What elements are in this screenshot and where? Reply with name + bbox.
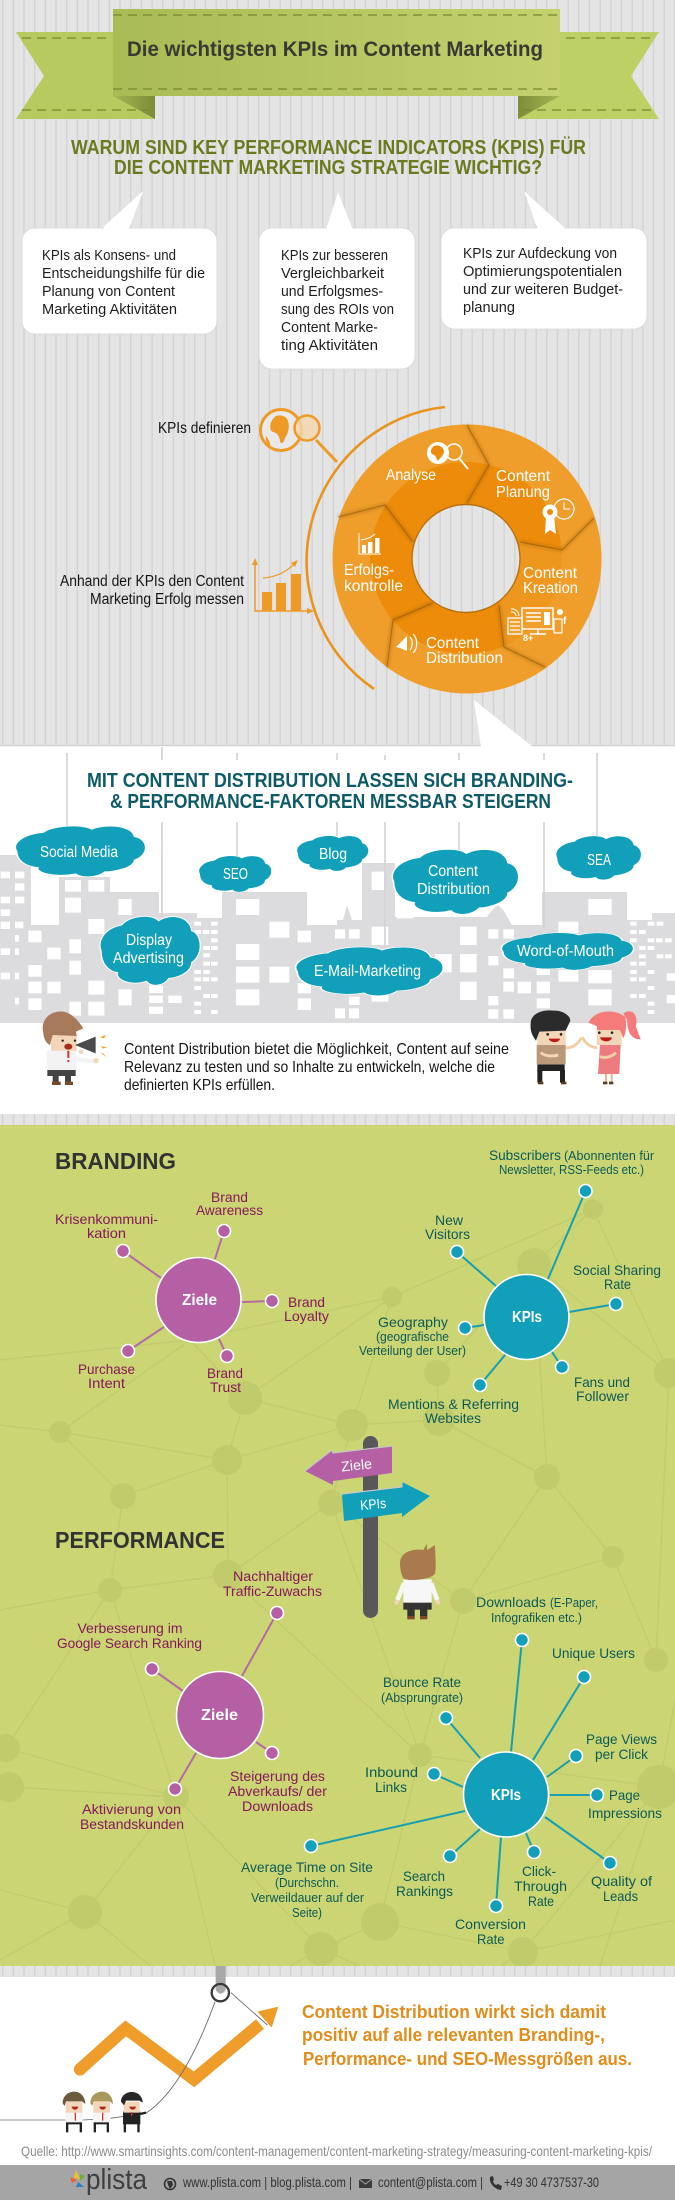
speech bubble 2: sung des ROIs von <box>281 301 394 318</box>
label: Click-Through Rate: Rate <box>528 1893 554 1909</box>
performance KPI diagram <box>241 1594 662 1947</box>
icon: small chart <box>359 533 381 554</box>
label: Inbound Links: Links <box>375 1779 407 1795</box>
label: Page Impressions <box>588 1787 662 1821</box>
label: Quality of Leads <box>591 1873 652 1904</box>
cloud: SEA <box>556 836 641 880</box>
label: Page Impressions: Page <box>609 1787 640 1803</box>
segment label: Content Distribution: Distribution <box>426 650 503 667</box>
label: Anhand der KPIs: Anhand der KPIs den Content <box>60 573 245 590</box>
label: Social Sharing Rate <box>573 1262 661 1292</box>
growth arrow <box>74 2007 278 2079</box>
heading: BRANDING: BRANDING <box>55 1148 176 1174</box>
label: KPIs definieren: KPIs definieren <box>158 420 251 437</box>
label: Mentions and Referring Websites: Websites <box>425 1410 481 1426</box>
label: Verbesserung im Google Search Ranking <box>57 1620 202 1651</box>
panel: green KPI network section <box>0 1125 675 1967</box>
label: Brand Awareness: Awareness <box>196 1202 263 1218</box>
man two <box>90 2092 113 2132</box>
speech bubble 3: und zur weiteren Budget- <box>463 281 623 298</box>
footer email: content@plista.com | <box>378 2174 483 2190</box>
segment label: Content Planung: Content <box>496 468 551 485</box>
speech bubble 2 <box>259 192 415 369</box>
label: Subscribers: Newsletter, RSS-Feeds etc.) <box>499 1163 644 1177</box>
speech bubble 3: KPIs zur Aufdeckung von <box>463 245 617 262</box>
cloud: E-Mail-Marketing <box>295 947 443 996</box>
heading: why KPIs matter <box>71 136 586 179</box>
paragraph: content distribution: Content Distribution bietet die Möglichkeit, Content auf seine <box>124 1041 509 1058</box>
plista logo: plista <box>86 2164 148 2196</box>
label: Page Views per Click: per Click <box>595 1746 649 1762</box>
arrow: KPIs <box>342 1482 430 1521</box>
speech bubble 2: ting Aktivitäten <box>281 337 378 354</box>
section bottom edge line <box>0 745 675 746</box>
label: Mentions and Referring Websites <box>388 1396 519 1426</box>
speech bubble 1: Marketing Aktivitäten <box>42 301 177 318</box>
label: Quality of Leads: Quality of <box>591 1873 652 1889</box>
label: Geography: (geografische <box>376 1330 449 1344</box>
label: Click-Through Rate: Through <box>514 1878 567 1894</box>
icon: megaphone <box>396 634 417 653</box>
label: Brand Loyalty: Brand <box>288 1294 325 1310</box>
background: striped grey header section <box>0 0 675 746</box>
label: Downloads: (E-Paper, <box>550 1596 598 1610</box>
label: Aktivierung von Bestandskunden: Bestandskunden <box>80 1816 184 1832</box>
cloud: Display Advertising: Advertising <box>113 950 184 967</box>
label: Brand Trust: Brand <box>207 1365 243 1381</box>
segment label: Erfolgskontrolle: Erfolgs- <box>344 562 394 579</box>
cloud: Display Advertising: Display <box>126 932 172 949</box>
heading: PERFORMANCE: PERFORMANCE <box>55 1527 225 1553</box>
icon: devices and social: f <box>563 616 567 627</box>
icon: globe <box>164 2178 176 2190</box>
title ribbon <box>16 9 659 119</box>
icon: phone <box>490 2176 502 2190</box>
label: Downloads <box>476 1594 598 1625</box>
label: Page Views per Click: Page Views <box>586 1731 657 1747</box>
branding KPI diagram: KPIs <box>512 1309 542 1326</box>
segment label: Content Distribution: Content <box>426 635 480 652</box>
characters: high-five couple <box>531 1010 641 1084</box>
tick strip above green section <box>0 1114 675 1125</box>
branding goals diagram: Ziele <box>182 1292 217 1309</box>
label: Purchase Intent: Purchase <box>78 1361 135 1377</box>
label: Anhand der KPIs: Marketing Erfolg messen <box>90 591 244 608</box>
city skyline <box>0 855 675 1023</box>
speech pointer from distribution segment <box>474 700 533 747</box>
cloud: SEA: SEA <box>587 852 612 869</box>
man one <box>63 2092 85 2132</box>
label: Subscribers <box>489 1147 654 1177</box>
label: Krisenkommunikation: Krisenkommuni- <box>55 1211 158 1227</box>
cloud: SEO: SEO <box>223 866 248 883</box>
speech bubble 2: KPIs zur besseren <box>281 247 388 264</box>
performance KPI diagram: KPIs <box>491 1787 521 1804</box>
speech bubble 1: KPIs als Konsens- und <box>42 247 176 264</box>
heading: why KPIs matter: DIE CONTENT MARKETING STRATEGIE WICHTIG? <box>114 157 542 179</box>
label: Bounce Rate <box>381 1674 463 1705</box>
segment label: Content Kreation: Content <box>523 565 578 582</box>
heading: content distribution <box>87 770 573 813</box>
label: Conversion Rate: Conversion <box>455 1916 526 1932</box>
speech bubble 1: Entscheidungshilfe für die <box>42 265 205 282</box>
label: Quality of Leads: Leads <box>603 1888 638 1904</box>
cloud: SEO <box>199 856 272 892</box>
arrow: KPIs: KPIs <box>359 1495 387 1513</box>
label: Social Sharing Rate: Social Sharing <box>573 1262 661 1278</box>
label: Nachhaltiger Traffic-Zuwachs <box>223 1568 322 1599</box>
cloud: Content Distribution: Distribution <box>417 881 490 898</box>
icon: envelope <box>359 2179 372 2188</box>
label: Purchase Intent <box>78 1361 135 1391</box>
label: Inbound Links: Inbound <box>365 1764 418 1780</box>
label: Brand Awareness <box>196 1189 263 1218</box>
segment label: Erfolgskontrolle <box>344 562 403 595</box>
label: Average Time on Site: Average Time on Site <box>241 1859 373 1875</box>
label: Average Time on Site: Seite) <box>292 1906 322 1920</box>
label: Nachhaltiger Traffic-Zuwachs: Traffic-Zuwachs <box>223 1583 322 1599</box>
cloud: Word-of-Mouth: Word-of-Mouth <box>517 943 614 960</box>
label: Anhand der KPIs <box>60 573 245 608</box>
icon: devices and social <box>508 608 567 643</box>
cloud: Display Advertising <box>100 916 200 985</box>
label: Fans und Follower: Follower <box>576 1388 629 1404</box>
cloud: Social Media <box>15 826 146 877</box>
heading: why KPIs matter: WARUM SIND KEY PERFORMANCE INDICATORS (KPIS) FÜR <box>71 136 586 159</box>
content marketing cycle donut <box>332 424 610 694</box>
label: Verbesserung im Google Search Ranking: Google Search Ranking <box>57 1635 202 1651</box>
icon: clock and rosette <box>542 499 574 534</box>
closing statement: Performance- und SEO-Messgrößen aus. <box>303 2048 632 2069</box>
label: Nachhaltiger Traffic-Zuwachs: Nachhaltiger <box>233 1568 313 1584</box>
arrow: Ziele <box>305 1446 392 1485</box>
speech bubble 1: Planung von Content <box>42 283 176 300</box>
label: Conversion Rate <box>455 1916 526 1947</box>
speech bubble 3: planung <box>463 299 515 316</box>
label: Unique Users: Unique Users <box>552 1645 635 1661</box>
label: Brand Awareness: Brand <box>211 1189 248 1205</box>
label: Fans und Follower: Fans und <box>574 1374 630 1390</box>
orange arc around the cycle <box>307 407 445 689</box>
speech bubble 1 <box>22 191 217 334</box>
closing statement: positiv auf alle relevanten Branding-, <box>302 2024 605 2045</box>
label: Brand Loyalty <box>284 1294 329 1324</box>
segment label: Content Planung: Planung <box>496 484 550 501</box>
segment label: Content Planung <box>496 468 551 501</box>
segment label: Content Kreation: Kreation <box>523 580 578 597</box>
icon: rising bar chart <box>252 558 314 614</box>
cloud: E-Mail-Marketing: E-Mail-Marketing <box>314 963 421 980</box>
paragraph: content distribution: definierten KPIs erfüllen. <box>124 1077 275 1094</box>
white band under the skyline <box>0 1023 675 1114</box>
label: Steigerung des Abverkaufs: Steigerung des <box>230 1768 325 1784</box>
network background <box>0 1209 675 1966</box>
label: Subscribers: Subscribers <box>489 1147 561 1163</box>
performance goals diagram: Ziele <box>201 1707 238 1724</box>
segment label: Erfolgskontrolle: kontrolle <box>344 578 403 595</box>
speech bubble 2: Content Marke- <box>281 319 378 336</box>
label: Downloads: Downloads <box>476 1594 546 1610</box>
label: Verbesserung im Google Search Ranking: Verbesserung im <box>78 1620 182 1636</box>
label: Search Rankings <box>396 1868 453 1899</box>
label: Krisenkommunikation <box>55 1211 158 1241</box>
segment label: Content Distribution <box>426 635 503 667</box>
label: Average Time on Site: (Durchschn. <box>275 1876 339 1890</box>
segment label: Analyse: Analyse <box>386 467 436 484</box>
heading: content distribution: MIT CONTENT DISTRIBUTION LASSEN SICH BRANDING- <box>87 770 573 792</box>
branding goals diagram <box>55 1189 329 1395</box>
label: Aktivierung von Bestandskunden: Aktivierung von <box>82 1801 181 1817</box>
character: man seen from behind <box>394 1544 440 1619</box>
cloud: Blog <box>297 836 369 871</box>
label: Conversion Rate: Rate <box>477 1931 505 1947</box>
label: Brand Loyalty: Loyalty <box>284 1308 329 1324</box>
icon: analyse globe <box>427 442 468 469</box>
heading: content distribution: & PERFORMANCE-FAKTOREN MESSBAR STEIGERN <box>110 791 551 813</box>
label: Click-Through Rate <box>514 1863 567 1909</box>
speech bubble 3: Optimierungspotentialen <box>463 263 622 280</box>
man three <box>121 2092 146 2132</box>
label: Geography <box>359 1314 466 1358</box>
label: Steigerung des Abverkaufs: Downloads <box>242 1798 313 1814</box>
cycle folds <box>338 425 594 667</box>
label: Subscribers: (Abonnenten für <box>564 1149 654 1163</box>
paragraph: content distribution <box>124 1041 509 1094</box>
label: Click-Through Rate: Click- <box>522 1863 556 1879</box>
paragraph: content distribution: Relevanz zu testen und so Inhalte zu entwickeln, welche die <box>124 1059 495 1076</box>
label: Geography: Verteilung der User) <box>359 1344 466 1358</box>
label: Geography: Geography <box>378 1314 448 1330</box>
signpost with direction arrows <box>305 1436 430 1618</box>
label: Search Rankings: Rankings <box>396 1883 453 1899</box>
label: Brand Trust: Trust <box>210 1379 241 1395</box>
arrow: Ziele: Ziele <box>340 1455 373 1475</box>
cloud: Social Media: Social Media <box>40 844 118 861</box>
speech bubble 3 <box>441 191 647 329</box>
speech bubble 2: und Erfolgsmes- <box>281 283 383 300</box>
closing statement: Content Distribution wirkt sich damit <box>302 2001 606 2022</box>
label: Steigerung des Abverkaufs <box>228 1768 327 1814</box>
cloud: Blog: Blog <box>319 846 347 863</box>
tick strip below green section <box>0 1966 675 1977</box>
cloud: Content Distribution <box>392 849 519 914</box>
label: New Visitors: New <box>435 1212 464 1228</box>
label: Inbound Links <box>365 1764 418 1795</box>
speech bubble 2: Vergleichbarkeit <box>281 265 385 282</box>
label: Bounce Rate: (Absprungrate) <box>381 1691 463 1705</box>
footer web links: www.plista.com | blog.plista.com | <box>182 2174 352 2190</box>
label: Aktivierung von Bestandskunden <box>80 1801 184 1832</box>
label: Krisenkommunikation: kation <box>87 1225 126 1241</box>
label: Search Rankings: Search <box>403 1868 445 1884</box>
label: Bounce Rate: Bounce Rate <box>383 1674 461 1690</box>
label: Fans und Follower <box>574 1374 630 1404</box>
label: Downloads: Infografiken etc.) <box>491 1611 582 1625</box>
label: Purchase Intent: Intent <box>88 1375 125 1391</box>
branding KPI diagram <box>359 1147 661 1426</box>
segment label: Content Kreation <box>523 565 578 597</box>
label: Page Views per Click <box>586 1731 657 1762</box>
footer phone number: +49 30 4737537-30 <box>504 2174 599 2190</box>
label: Mentions and Referring Websites: Mentions & Referring <box>388 1396 519 1412</box>
label: Average Time on Site: Verweildauer auf der <box>251 1891 364 1905</box>
icon: devices and social: 8+ <box>523 633 533 643</box>
label: Brand Trust <box>207 1365 243 1395</box>
icon: globe with magnifier <box>260 410 337 462</box>
label: New Visitors: Visitors <box>425 1226 470 1242</box>
cloud: Word-of-Mouth <box>501 933 634 970</box>
performance goals diagram <box>57 1568 327 1832</box>
title: Die wichtigsten KPIs im Content Marketing <box>127 38 543 61</box>
cloud: Content Distribution: Content <box>428 863 479 880</box>
label: Average Time on Site <box>241 1859 373 1920</box>
closing statement <box>302 2001 632 2069</box>
label: Social Sharing Rate: Rate <box>604 1276 631 1292</box>
character: man with megaphone <box>43 1011 107 1085</box>
footer bar <box>0 2164 675 2200</box>
label: Page Impressions: Impressions <box>588 1805 662 1821</box>
illustration: men pulling the growth arrow <box>0 1966 278 2132</box>
label: New Visitors <box>425 1212 470 1242</box>
label: Steigerung des Abverkaufs: Abverkaufs/ der <box>228 1783 327 1799</box>
